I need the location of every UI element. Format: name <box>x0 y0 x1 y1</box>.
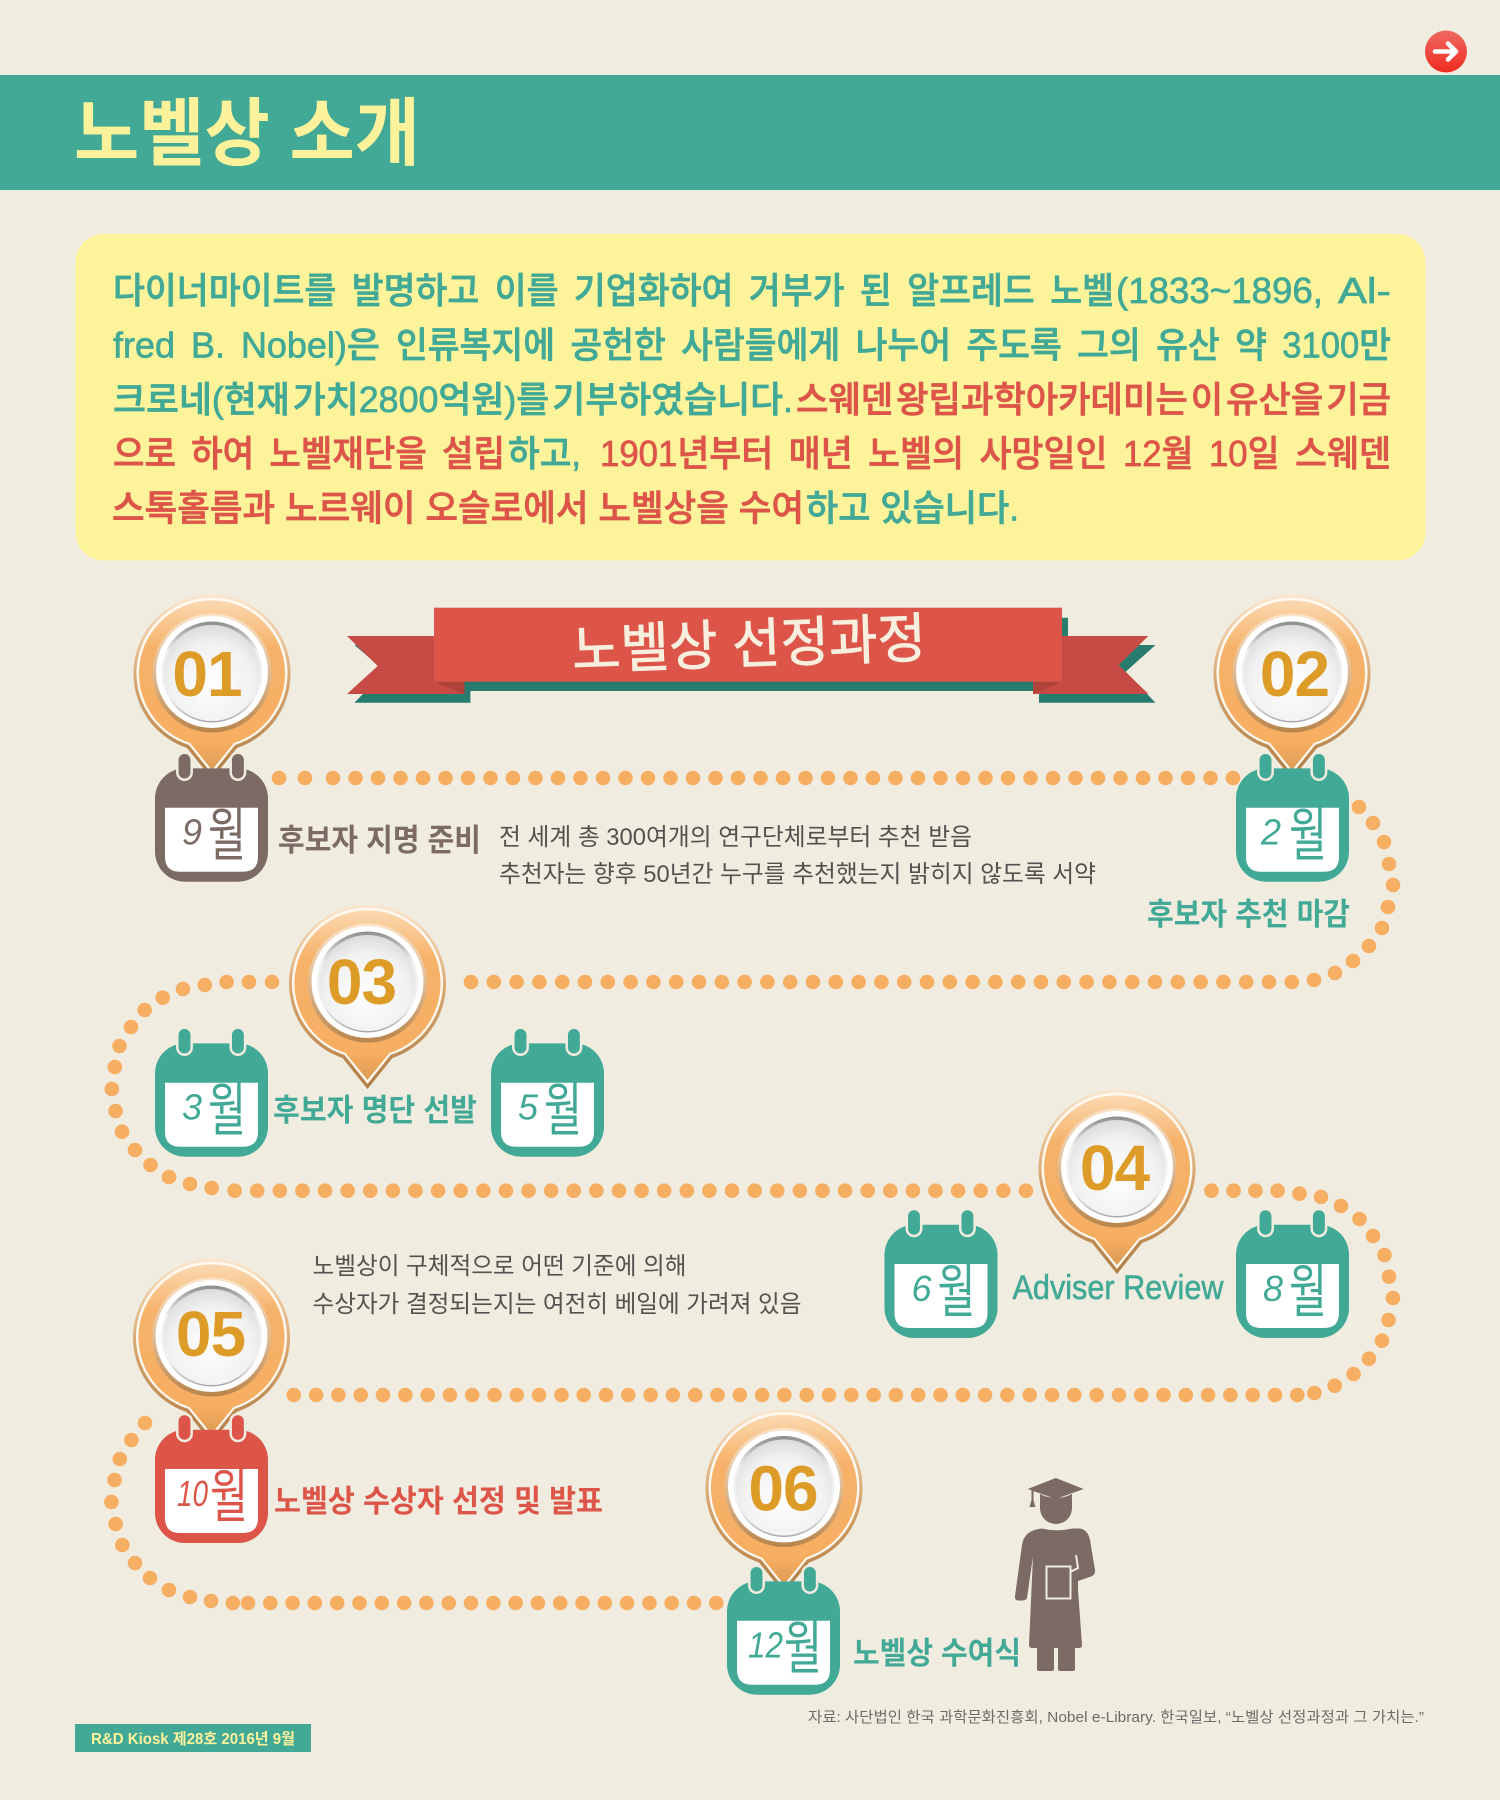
label: shortlist selection: 후보자 명단 선발 <box>273 1093 477 1128</box>
calendar: May <box>491 1028 604 1157</box>
source note: 자료: 사단법인 한국 과학문화진흥회, Nobel e-Library. 한국일보, “노벨상 선정과정과 그 가치는.” <box>808 1708 1424 1726</box>
calendar: June: 6 <box>912 1268 932 1309</box>
text block: selection criteria note <box>312 1253 802 1318</box>
calendar: August <box>1236 1209 1349 1338</box>
panel: introduction: Al- <box>1338 270 1391 311</box>
label: nominee preparation: 후보자 지명 준비 <box>278 823 481 858</box>
panel: introduction: 하고, <box>508 433 581 474</box>
calendar: March <box>155 1028 268 1157</box>
step 04 pin <box>1038 1090 1196 1274</box>
step 03 pin: 03 <box>327 946 396 1018</box>
calendar: December <box>727 1566 840 1695</box>
step 06 pin: 06 <box>748 1452 818 1524</box>
panel: introduction: 스웨덴 왕립과학아카데미는 이 유산을 기금 <box>796 379 1391 420</box>
icon: next arrow button <box>1425 30 1467 72</box>
panel: introduction: 하고 있습니다. <box>806 488 1019 528</box>
text block: nomination notes: 전 세계 총 300여개의 연구단체로부터 추천 받음 <box>499 824 972 851</box>
calendar: May: 월 <box>544 1064 582 1148</box>
step 01 pin <box>134 595 290 779</box>
calendar: September <box>155 753 268 882</box>
panel: introduction: 다이너마이트를 발명하고 이를 기업화하여 거부가 된 알프레드 노벨 <box>113 270 1114 311</box>
label: award ceremony: 노벨상 수여식 <box>853 1636 1021 1671</box>
calendar: June <box>884 1209 998 1338</box>
text block: nomination notes <box>499 824 1096 888</box>
calendar: March: 3 <box>182 1087 202 1128</box>
label: adviser review: Adviser Review <box>1012 1269 1224 1307</box>
calendar: August: 월 <box>1289 1245 1327 1329</box>
step 04 pin: 04 <box>1080 1132 1150 1204</box>
panel: introduction <box>76 234 1426 560</box>
panel: introduction: (1833~1896, <box>1116 270 1323 311</box>
text block: selection criteria note: 수상자가 결정되는지는 여전히 베일에 가려져 있음 <box>312 1291 802 1318</box>
calendar: December: 12 <box>748 1625 783 1666</box>
issue tag: R&D Kiosk 제28호 2016년 9월 <box>91 1730 295 1748</box>
calendar: October <box>155 1414 268 1543</box>
panel: introduction: 1901년부터 매년 노벨의 사망일인 12월 10일 스웨덴 <box>600 433 1391 474</box>
calendar: February: 월 <box>1289 789 1327 873</box>
calendar: September: 9 <box>182 812 202 853</box>
calendar: October: 10 <box>177 1473 208 1514</box>
step 05 pin <box>133 1259 290 1443</box>
step 02 pin <box>1214 595 1370 779</box>
calendar: March: 월 <box>208 1064 246 1148</box>
issue tag <box>75 1724 311 1752</box>
panel: introduction: 크로네(현재 가치2800억원)를 기부하였습니다. <box>113 379 793 420</box>
panel: introduction: 으로 하여 노벨재단을 설립 <box>113 433 505 474</box>
dotted timeline path <box>104 771 1400 1610</box>
panel: introduction: fred B. Nobel)은 <box>113 324 380 366</box>
calendar: October: 월 <box>210 1450 248 1534</box>
calendar: February <box>1236 753 1349 882</box>
calendar: December: 월 <box>784 1602 822 1686</box>
title band <box>0 75 1500 190</box>
panel: introduction: 스톡홀름과 노르웨이 오슬로에서 노벨상을 수여 <box>112 488 804 528</box>
calendar: June: 월 <box>938 1245 976 1329</box>
step 06 pin <box>706 1410 862 1594</box>
ribbon heading: 노벨상 선정과정 <box>571 609 927 681</box>
calendar: February: 2 <box>1260 812 1281 853</box>
label: laureates announced: 노벨상 수상자 선정 및 발표 <box>274 1484 603 1519</box>
text block: nomination notes: 추천자는 향후 50년간 누구를 추천했는지 밝히지 않도록 서약 <box>499 861 1096 888</box>
calendar: September: 월 <box>208 789 246 873</box>
step 02 pin: 02 <box>1260 638 1329 710</box>
text block: selection criteria note: 노벨상이 구체적으로 어떤 기준에 의해 <box>312 1253 686 1280</box>
calendar: August: 8 <box>1263 1268 1283 1309</box>
label: nomination deadline: 후보자 추천 마감 <box>1147 897 1350 932</box>
step 01 pin: 01 <box>172 638 242 710</box>
step 05 pin: 05 <box>176 1298 245 1370</box>
title band: 노벨상 소개 <box>74 92 420 175</box>
step 03 pin <box>289 905 446 1089</box>
panel: introduction: 인류복지에 공헌한 사람들에게 나누어 주도록 그의 유산 약 3100만 <box>396 324 1391 366</box>
calendar: May: 5 <box>518 1087 539 1128</box>
ribbon heading <box>347 608 1156 703</box>
icon: graduate figure <box>1015 1478 1095 1671</box>
